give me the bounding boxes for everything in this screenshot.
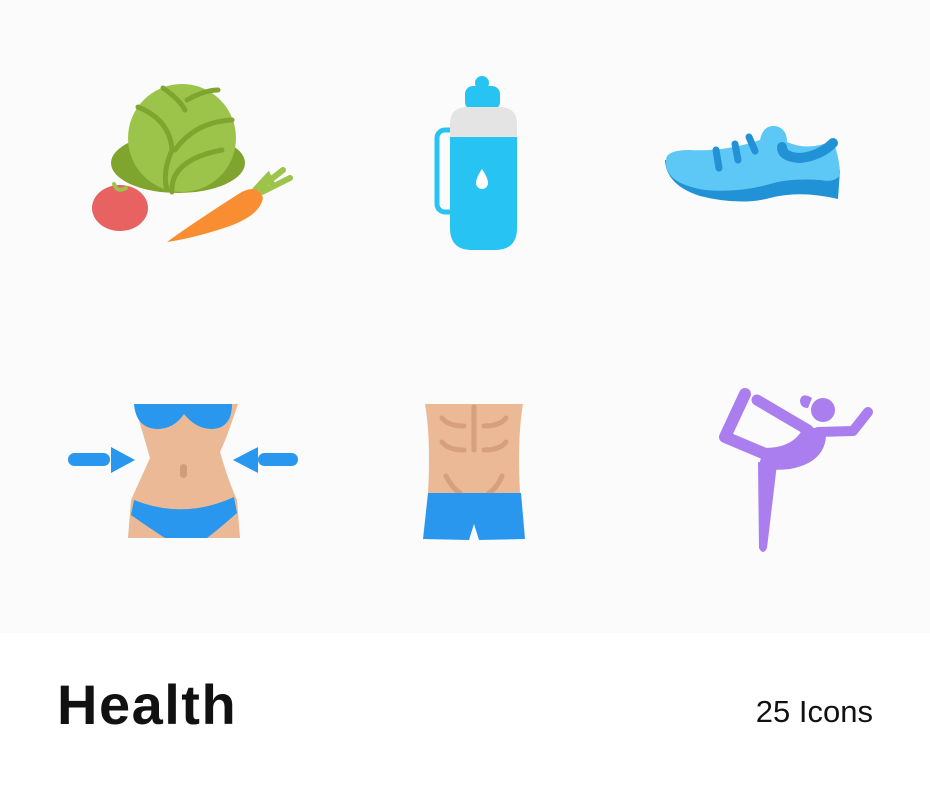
icon: vegetables xyxy=(92,84,290,242)
icon: slim waist xyxy=(68,404,298,538)
icon: yoga pose xyxy=(725,394,868,552)
title: Health xyxy=(57,673,237,736)
icon: water bottle xyxy=(437,76,517,250)
icon: abs xyxy=(423,404,525,540)
icon: running shoe xyxy=(665,126,840,202)
subtitle: icon count: 25 Icons xyxy=(756,694,873,729)
